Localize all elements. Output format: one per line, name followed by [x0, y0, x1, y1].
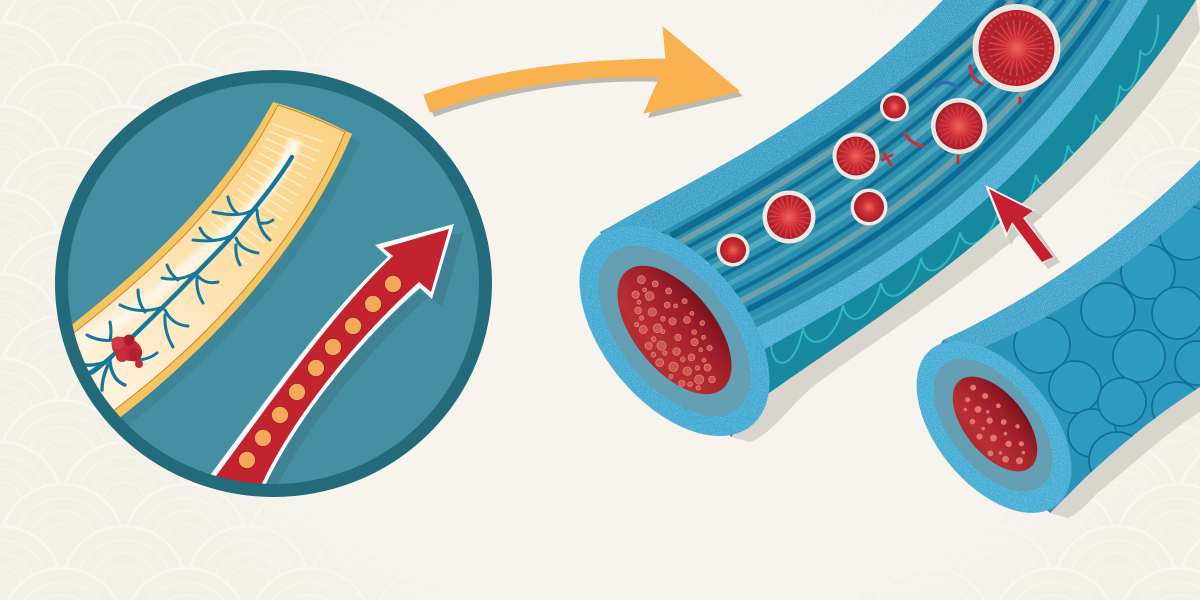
connector shadow: [428, 32, 743, 118]
cell 6: [931, 98, 987, 154]
arrow: orange connector: [424, 27, 743, 118]
panel: magnified circular inset: [40, 76, 486, 494]
cell 3: [832, 132, 880, 180]
top wall strip: [943, 160, 1200, 352]
cell 2: [762, 190, 816, 244]
cell circles on wall: [1014, 206, 1200, 488]
cell 5: [850, 188, 888, 226]
belly scallops: [771, 15, 1158, 363]
main artery cutaway: [579, 0, 1200, 442]
lumen blood dots: [632, 275, 716, 390]
red arrow shadow: [266, 232, 464, 484]
inset disc: [62, 76, 486, 490]
hatch marks: [222, 132, 298, 252]
vessel opening outer ring: [542, 191, 807, 471]
opening middle ring: [910, 337, 1076, 513]
pointer shadow: [992, 192, 1060, 269]
vessel opening middle ring: [569, 219, 780, 443]
arrow: red pointer to artery wall: [985, 185, 1060, 269]
artery body: [600, 0, 1196, 437]
cell 4: [880, 92, 909, 122]
arrow dots: [238, 276, 402, 468]
pointer fill: [989, 189, 1053, 262]
vessel lumen: [617, 266, 732, 394]
artery shadow: [731, 0, 1200, 442]
band inner fill: [74, 104, 346, 410]
blood cells: [716, 4, 1060, 266]
yellow vessel band: [72, 102, 352, 418]
vessel body: [917, 160, 1200, 513]
disc border: [62, 76, 486, 490]
lower wall strip: [750, 0, 1148, 350]
band shadow: [120, 137, 360, 425]
blood clot: [112, 334, 143, 368]
vessel shadow: [1050, 380, 1200, 518]
small cell fragments: [882, 66, 1020, 165]
cell 7 large: [972, 4, 1060, 92]
striped inner wall: [664, 0, 1128, 327]
pointer outline: [985, 185, 1053, 264]
red arrow fill: [213, 229, 449, 490]
lumen: [952, 376, 1038, 472]
top wall strip: [600, 0, 996, 245]
red arrow outline: [208, 224, 454, 490]
lumen blood dots: [963, 384, 1026, 464]
pale centre stripe: [80, 140, 296, 345]
branching vein: [84, 157, 292, 390]
opening outer ring: [886, 313, 1102, 541]
cell 1: [716, 234, 750, 266]
connector fill: [424, 27, 739, 113]
second vessel: [916, 160, 1200, 518]
vessel section with branching vein and arrow: [40, 102, 464, 494]
